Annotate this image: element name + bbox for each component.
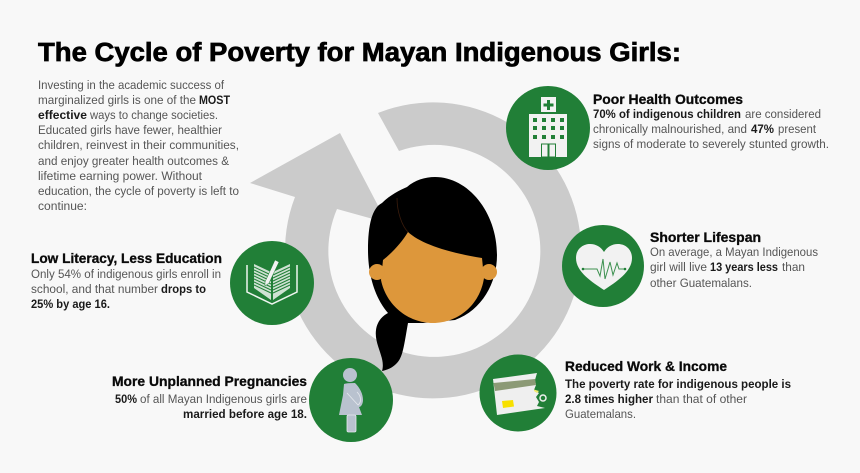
intro paragraph: lifetime earning power. Without bbox=[38, 169, 203, 183]
text: low literacy bbox=[31, 251, 222, 311]
text: poor health outcomes: Poor Health Outcomes bbox=[593, 92, 743, 107]
text: reduced work and income: Guatemalans. bbox=[565, 407, 636, 421]
text: poor health outcomes: chronically malnourished, and bbox=[593, 122, 747, 136]
text: low literacy: school, and that number bbox=[31, 282, 158, 296]
intro paragraph bbox=[38, 78, 239, 213]
icon: heart with pulse bbox=[562, 225, 644, 307]
intro paragraph: effective bbox=[38, 108, 87, 122]
text: reduced work and income: Reduced Work & Income bbox=[565, 359, 727, 374]
girl's head illustration bbox=[368, 177, 497, 371]
text: shorter lifespan: girl will live bbox=[650, 260, 707, 274]
intro paragraph: marginalized girls is one of the bbox=[38, 93, 196, 107]
text: poor health outcomes: are considered bbox=[745, 107, 821, 121]
text: low literacy: Low Literacy, Less Education bbox=[31, 251, 222, 266]
text: reduced work and income: 2.8 times higher bbox=[565, 392, 653, 406]
text: poor health outcomes bbox=[593, 92, 829, 151]
text: poor health outcomes: signs of moderate to severely stunted growth. bbox=[593, 137, 829, 151]
title: The Cycle of Poverty for Mayan Indigenous Girls: bbox=[38, 39, 681, 67]
text: shorter lifespan: 13 years less bbox=[710, 260, 778, 274]
text: unplanned pregnancies: married before age 18. bbox=[183, 407, 307, 421]
text: shorter lifespan: On average, a Mayan Indigenous bbox=[650, 245, 818, 259]
text: poor health outcomes: 47% bbox=[751, 122, 774, 136]
intro paragraph: Educated girls have fewer, healthier bbox=[38, 123, 222, 137]
icon: pregnant woman bbox=[309, 358, 393, 442]
intro paragraph: and enjoy greater health outcomes & bbox=[38, 154, 230, 168]
text: shorter lifespan: Shorter Lifespan bbox=[650, 230, 761, 245]
text: reduced work and income bbox=[565, 359, 791, 421]
intro paragraph: continue: bbox=[38, 199, 87, 213]
icon: book and pencil bbox=[230, 241, 314, 325]
text: poor health outcomes: present bbox=[778, 122, 817, 136]
cycle arrow bbox=[250, 102, 581, 398]
text: unplanned pregnancies: 50% bbox=[115, 392, 137, 406]
text: shorter lifespan: other Guatemalans. bbox=[650, 276, 752, 290]
text: shorter lifespan bbox=[650, 230, 818, 290]
text: shorter lifespan: than bbox=[782, 260, 805, 274]
text: reduced work and income: than that of other bbox=[656, 392, 747, 406]
text: reduced work and income: The poverty rate for indigenous people is bbox=[565, 377, 791, 391]
text: unplanned pregnancies bbox=[112, 374, 307, 421]
hair parting line bbox=[397, 198, 408, 232]
text: unplanned pregnancies: of all Mayan Indigenous girls are bbox=[140, 392, 307, 406]
text: low literacy: 25% by age 16. bbox=[31, 297, 110, 311]
intro paragraph: children, reinvest in their communities, bbox=[38, 138, 239, 152]
intro paragraph: Investing in the academic success of bbox=[38, 78, 225, 92]
text: low literacy: drops to bbox=[161, 282, 206, 296]
text: low literacy: Only 54% of indigenous girls enroll in bbox=[31, 267, 221, 281]
intro paragraph: MOST bbox=[199, 93, 230, 107]
face bbox=[381, 232, 484, 323]
text: poor health outcomes: 70% of indigenous children bbox=[593, 107, 741, 121]
hair and ponytail bbox=[368, 177, 497, 371]
intro paragraph: ways to change societies. bbox=[89, 108, 218, 122]
icon: hospital bbox=[506, 86, 590, 170]
ears bbox=[369, 264, 385, 280]
intro paragraph: education, the cycle of poverty is left to bbox=[38, 184, 239, 198]
icon: torn credit card bbox=[480, 354, 556, 432]
text: unplanned pregnancies: More Unplanned Pregnancies bbox=[112, 374, 307, 389]
